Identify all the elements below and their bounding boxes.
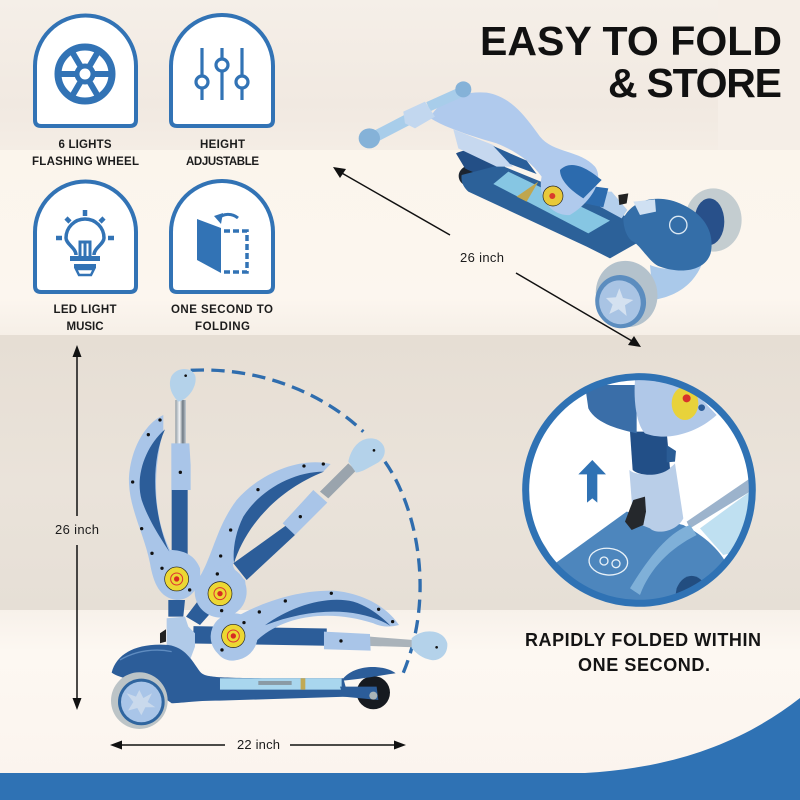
length dimension arrow: 26 inch bbox=[333, 167, 641, 347]
low fold position bbox=[193, 591, 447, 661]
icon: light bulb bbox=[56, 210, 114, 275]
deck bbox=[461, 165, 637, 258]
title: EASY TO FOLD bbox=[480, 18, 782, 64]
feature card: one second to folding: ONE SECOND TO bbox=[171, 304, 273, 316]
handlebar bbox=[372, 119, 408, 138]
neck bbox=[630, 432, 670, 475]
upper hub bbox=[585, 385, 637, 433]
feature card: one second to folding: FOLDING bbox=[195, 321, 250, 333]
folded scooter photo (top) bbox=[359, 81, 742, 334]
height dimension arrow: 26 inch: 26 inch bbox=[55, 522, 99, 537]
feature card: 6 lights flashing wheel: 6 LIGHTS bbox=[58, 139, 112, 151]
collar bbox=[629, 463, 683, 532]
icon: sliders bbox=[196, 48, 248, 100]
far wheel bbox=[685, 188, 742, 252]
lock knob bbox=[625, 497, 646, 530]
deck strip at right bbox=[687, 478, 750, 528]
feature card: height adjustable: ADJUSTABLE bbox=[186, 156, 259, 168]
wheel support bbox=[650, 255, 705, 300]
upright position bbox=[129, 369, 200, 600]
feature card: height adjustable bbox=[171, 15, 273, 168]
deck and base bbox=[112, 645, 348, 703]
front wheel bbox=[588, 254, 665, 334]
scooter head shell bbox=[556, 512, 724, 600]
front wheel bbox=[111, 672, 168, 729]
feature card: 6 lights flashing wheel: FLASHING WHEEL bbox=[32, 156, 139, 168]
height dimension arrow: 26 inch bbox=[55, 345, 99, 710]
stem collar and lock bbox=[168, 600, 185, 617]
inset detail circle: lock mechanism bbox=[526, 377, 752, 608]
feature card: height adjustable: HEIGHT bbox=[200, 139, 245, 151]
length dimension arrow: 26 inch: 26 inch bbox=[460, 250, 504, 265]
width dimension arrow: 22 inch: 22 inch bbox=[237, 737, 280, 752]
stem and lock bbox=[598, 192, 627, 218]
title bbox=[480, 18, 782, 106]
head shell bbox=[623, 199, 712, 271]
rear wheel and fender bbox=[459, 165, 483, 187]
icon: folding sheet bbox=[197, 213, 247, 273]
caption: ONE SECOND. bbox=[578, 655, 710, 675]
feature card: one second to folding bbox=[171, 181, 273, 333]
feature card: LED light music: MUSIC bbox=[66, 321, 104, 333]
feature card: LED light music: LED LIGHT bbox=[54, 304, 116, 316]
feature card: 6 lights flashing wheel bbox=[32, 15, 139, 168]
mid fold position bbox=[186, 438, 385, 625]
dashed fold arc bbox=[191, 370, 420, 677]
title: & STORE bbox=[608, 60, 782, 106]
icon: wheel bbox=[58, 47, 112, 101]
scooter in three folding positions bbox=[111, 369, 447, 729]
folded seat shell bbox=[431, 92, 598, 215]
caption bbox=[525, 630, 761, 675]
width dimension arrow: 22 inch bbox=[110, 737, 406, 752]
bottom blue wave band bbox=[0, 698, 800, 800]
caption: RAPIDLY FOLDED WITHIN bbox=[525, 630, 761, 650]
feature card: LED light music bbox=[35, 182, 136, 333]
arrow up bbox=[578, 460, 606, 503]
rear fender and wheel bbox=[357, 676, 390, 709]
